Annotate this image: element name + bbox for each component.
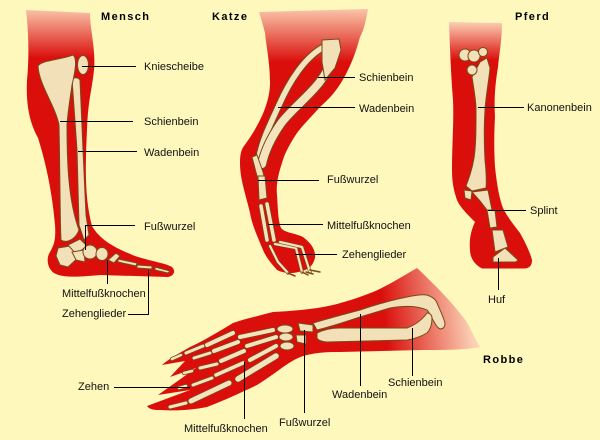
knee bones (459, 48, 488, 75)
panel: Katze (212, 9, 414, 276)
cat foot bones (252, 155, 320, 276)
label: Schienbein: Schienbein (359, 72, 413, 84)
label: Wadenbein (332, 314, 387, 401)
human leg silhouette (26, 10, 174, 277)
fibula (72, 78, 89, 240)
label: Wadenbein (278, 103, 414, 115)
label: Schienbein (388, 328, 442, 389)
label: Mittelfußknochen: Mittelfußknochen (184, 423, 268, 435)
label: Mittelfußknochen (184, 362, 268, 435)
cannon bone (466, 58, 490, 191)
seal flipper silhouette (147, 268, 480, 410)
label: Mensch: Mensch (101, 11, 150, 23)
label: Splint: Splint (530, 205, 558, 217)
label: Fußwurzel (86, 221, 195, 250)
seal leg bones (313, 295, 445, 342)
tibia and fibula (259, 39, 341, 164)
label: Mittelfußknochen: Mittelfußknochen (327, 220, 411, 232)
label: Robbe: Robbe (483, 354, 524, 366)
label: Zehenglieder: Zehenglieder (62, 308, 127, 320)
label: Schienbein (60, 116, 198, 128)
label: Mittelfußknochen: Mittelfußknochen (62, 288, 146, 300)
seal tarsal bones (277, 323, 313, 350)
label: Mittelfußknochen (62, 260, 146, 300)
label: Splint (488, 205, 558, 217)
label: Fußwurzel: Fußwurzel (279, 417, 330, 429)
label: Huf (488, 258, 506, 306)
horse leg silhouette (449, 22, 532, 268)
label: Kanonenbein: Kanonenbein (527, 102, 592, 114)
label: Schienbein: Schienbein (388, 377, 442, 389)
label: Zehenglieder (295, 249, 407, 261)
panel: Pferd (449, 11, 592, 306)
label: Huf: Huf (488, 294, 506, 306)
foot bones (56, 239, 170, 273)
label: Pferd: Pferd (515, 11, 550, 23)
label: Zehen (78, 381, 190, 393)
label: Wadenbein: Wadenbein (359, 103, 414, 115)
label: Zehenglieder: Zehenglieder (342, 249, 407, 261)
label: Katze: Katze (212, 11, 248, 23)
label: Kanonenbein (478, 102, 592, 114)
label: Fußwurzel (258, 174, 378, 186)
label: Wadenbein: Wadenbein (144, 147, 199, 159)
label: Schienbein (318, 72, 413, 84)
label: Fußwurzel: Fußwurzel (327, 174, 378, 186)
patella (78, 56, 88, 74)
pastern and hoof bones (464, 190, 518, 262)
cat leg silhouette (240, 9, 368, 273)
label: Wadenbein: Wadenbein (332, 389, 387, 401)
label: Wadenbein (78, 147, 199, 159)
label: Kniescheibe (82, 61, 204, 73)
label: Zehenglieder (62, 270, 148, 320)
tibia (38, 55, 79, 241)
label: Fußwurzel: Fußwurzel (144, 221, 195, 233)
panel: Mensch (26, 10, 204, 320)
label: Kniescheibe: Kniescheibe (144, 61, 204, 73)
label: Fußwurzel (279, 330, 330, 429)
panel: Robbe (78, 268, 524, 435)
seal digit bones (170, 330, 276, 407)
label: Zehen: Zehen (78, 381, 109, 393)
label: Schienbein: Schienbein (144, 116, 198, 128)
